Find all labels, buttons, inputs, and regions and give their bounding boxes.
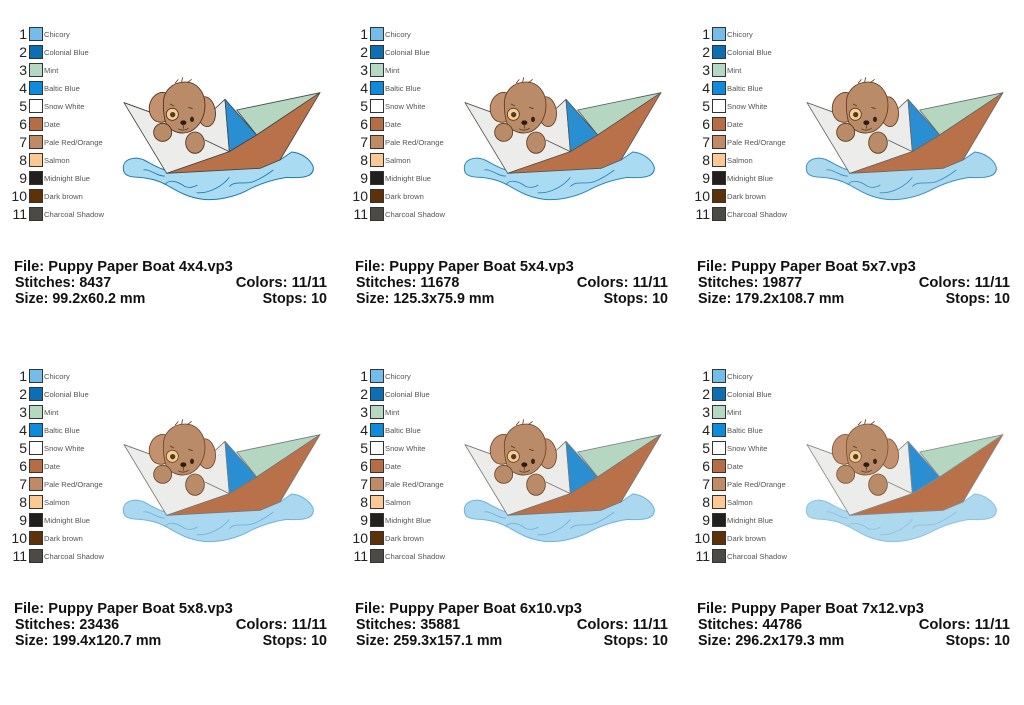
file details: Colors: 11/11 — [236, 617, 327, 633]
file details: Stops: 10 — [946, 291, 1010, 307]
file details: Stitches: 44786 — [698, 617, 802, 633]
legend: thread colours: Mint — [727, 408, 742, 417]
legend: thread colours: 6 — [19, 116, 27, 132]
legend: thread colours: 1 — [19, 368, 27, 384]
legend: thread colours: 11 — [695, 548, 710, 564]
legend: thread colours: 11 — [12, 206, 27, 222]
legend: thread colours: 9 — [19, 170, 27, 186]
legend: thread colours: 10 — [352, 530, 368, 546]
legend: thread colours: Midnight Blue — [727, 174, 773, 183]
file details: Stitches: 23436 — [15, 617, 119, 633]
legend: thread colours: Midnight Blue — [727, 516, 773, 525]
legend: thread colours: Colonial Blue — [44, 390, 89, 399]
legend: thread colours: Pale Red/Orange — [727, 480, 786, 489]
legend: thread colours: Colonial Blue — [44, 48, 89, 57]
legend: thread colours: Midnight Blue — [44, 516, 90, 525]
legend: thread colours: 1 — [360, 26, 368, 42]
file details — [355, 259, 668, 307]
legend: thread colours: 3 — [19, 62, 27, 78]
legend: thread colours: 4 — [702, 422, 710, 438]
legend: thread colours: 11 — [353, 548, 368, 564]
file details — [697, 259, 1010, 307]
file details: File: Puppy Paper Boat 4x4.vp3 — [14, 259, 233, 275]
legend: thread colours: Baltic Blue — [44, 84, 80, 93]
legend: thread colours: Snow White — [727, 102, 768, 111]
legend: thread colours: Pale Red/Orange — [44, 138, 103, 147]
legend: thread colours: Date — [385, 462, 401, 471]
legend: thread colours: Baltic Blue — [385, 84, 421, 93]
legend: thread colours: Charcoal Shadow — [727, 210, 787, 219]
legend: thread colours: 8 — [702, 152, 710, 168]
legend: thread colours: Charcoal Shadow — [44, 210, 104, 219]
legend: thread colours: 6 — [19, 458, 27, 474]
legend: thread colours: 5 — [360, 440, 368, 456]
file details: Colors: 11/11 — [236, 275, 327, 291]
file details: Size: 99.2x60.2 mm — [15, 291, 145, 307]
legend: thread colours — [352, 26, 445, 222]
file details: Stops: 10 — [263, 291, 327, 307]
legend: thread colours: Dark brown — [44, 192, 83, 201]
legend: thread colours: 11 — [12, 548, 27, 564]
legend: thread colours: Mint — [385, 408, 400, 417]
legend: thread colours: 10 — [11, 188, 27, 204]
legend: thread colours: 1 — [702, 368, 710, 384]
legend: thread colours: 5 — [19, 98, 27, 114]
legend: thread colours: Mint — [727, 66, 742, 75]
legend: thread colours: Salmon — [727, 498, 753, 507]
legend: thread colours: 7 — [702, 134, 710, 150]
file details: Stops: 10 — [604, 633, 668, 649]
legend: thread colours: 4 — [19, 80, 27, 96]
file details: Colors: 11/11 — [577, 275, 668, 291]
legend: thread colours: 9 — [360, 170, 368, 186]
legend: thread colours: 3 — [360, 404, 368, 420]
legend: thread colours: Dark brown — [385, 534, 424, 543]
legend: thread colours — [11, 26, 104, 222]
panel: Puppy Paper Boat 7x12 — [694, 368, 1010, 649]
legend: thread colours: 2 — [702, 386, 710, 402]
file details: Stitches: 8437 — [15, 275, 111, 291]
legend: thread colours: 1 — [360, 368, 368, 384]
legend: thread colours: 2 — [19, 44, 27, 60]
legend: thread colours: 7 — [360, 476, 368, 492]
legend: thread colours: 10 — [694, 530, 710, 546]
legend: thread colours: 7 — [19, 476, 27, 492]
legend: thread colours: 2 — [360, 44, 368, 60]
legend: thread colours: 10 — [694, 188, 710, 204]
legend: thread colours: 9 — [702, 512, 710, 528]
legend: thread colours: 2 — [19, 386, 27, 402]
file details: Stitches: 19877 — [698, 275, 802, 291]
legend: thread colours: Baltic Blue — [727, 426, 763, 435]
file details: Size: 199.4x120.7 mm — [15, 633, 161, 649]
legend: thread colours: 5 — [702, 440, 710, 456]
legend: thread colours: Charcoal Shadow — [727, 552, 787, 561]
panel: Puppy Paper Boat 5x7 — [694, 26, 1010, 307]
legend: thread colours: 6 — [360, 116, 368, 132]
legend: thread colours: 9 — [702, 170, 710, 186]
legend: thread colours — [11, 368, 104, 564]
legend: thread colours: Salmon — [44, 156, 70, 165]
legend: thread colours: Chicory — [44, 30, 70, 39]
legend: thread colours: Pale Red/Orange — [385, 480, 444, 489]
legend: thread colours: Snow White — [44, 102, 85, 111]
file details: File: Puppy Paper Boat 6x10.vp3 — [355, 601, 582, 617]
file details: Size: 179.2x108.7 mm — [698, 291, 844, 307]
legend: thread colours: 2 — [702, 44, 710, 60]
legend: thread colours — [352, 368, 445, 564]
panel: Puppy Paper Boat 6x10 — [352, 368, 668, 649]
panel: Puppy Paper Boat 5x4 — [352, 26, 668, 307]
legend: thread colours: 11 — [353, 206, 368, 222]
illustration: puppy in paper boat — [806, 77, 1003, 200]
file details: File: Puppy Paper Boat 7x12.vp3 — [697, 601, 924, 617]
legend: thread colours: Snow White — [385, 444, 426, 453]
legend: thread colours: Mint — [44, 66, 59, 75]
file details: Colors: 11/11 — [919, 275, 1010, 291]
legend: thread colours: Dark brown — [727, 192, 766, 201]
legend: thread colours: Midnight Blue — [385, 516, 431, 525]
file details — [14, 601, 327, 649]
legend: thread colours: Pale Red/Orange — [385, 138, 444, 147]
legend: thread colours: Salmon — [385, 498, 411, 507]
legend: thread colours: 8 — [360, 152, 368, 168]
file details: Colors: 11/11 — [919, 617, 1010, 633]
legend: thread colours: 7 — [702, 476, 710, 492]
legend: thread colours: Chicory — [385, 372, 411, 381]
legend: thread colours: Date — [44, 462, 60, 471]
legend: thread colours: Pale Red/Orange — [44, 480, 103, 489]
legend: thread colours: 7 — [19, 134, 27, 150]
legend: thread colours: Date — [385, 120, 401, 129]
legend: thread colours: Colonial Blue — [385, 390, 430, 399]
file details: File: Puppy Paper Boat 5x4.vp3 — [355, 259, 574, 275]
legend: thread colours: Date — [727, 120, 743, 129]
legend: thread colours: 1 — [702, 26, 710, 42]
file details: Stitches: 35881 — [356, 617, 460, 633]
legend: thread colours: 8 — [19, 494, 27, 510]
legend: thread colours: Baltic Blue — [385, 426, 421, 435]
legend: thread colours: Mint — [385, 66, 400, 75]
legend: thread colours: 6 — [702, 458, 710, 474]
legend: thread colours: Midnight Blue — [44, 174, 90, 183]
legend: thread colours: Colonial Blue — [727, 390, 772, 399]
legend: thread colours: Snow White — [727, 444, 768, 453]
file details: File: Puppy Paper Boat 5x7.vp3 — [697, 259, 916, 275]
legend: thread colours: 8 — [702, 494, 710, 510]
legend: thread colours: Chicory — [385, 30, 411, 39]
legend: thread colours: 5 — [360, 98, 368, 114]
illustration: puppy in paper boat — [464, 419, 661, 542]
legend: thread colours: 4 — [19, 422, 27, 438]
legend: thread colours: 5 — [702, 98, 710, 114]
legend: thread colours: Snow White — [44, 444, 85, 453]
legend: thread colours: Charcoal Shadow — [44, 552, 104, 561]
legend: thread colours: Date — [44, 120, 60, 129]
legend: thread colours: Salmon — [385, 156, 411, 165]
legend: thread colours: 4 — [360, 80, 368, 96]
legend: thread colours: Charcoal Shadow — [385, 210, 445, 219]
legend: thread colours — [694, 368, 787, 564]
legend: thread colours: 10 — [11, 530, 27, 546]
legend: thread colours: Baltic Blue — [727, 84, 763, 93]
illustration: puppy in paper boat — [806, 419, 1003, 542]
panel: Puppy Paper Boat 4x4 — [11, 26, 327, 307]
legend: thread colours: Chicory — [727, 372, 753, 381]
legend: thread colours: 6 — [702, 116, 710, 132]
file details: File: Puppy Paper Boat 5x8.vp3 — [14, 601, 233, 617]
illustration: puppy in paper boat — [464, 77, 661, 200]
legend: thread colours: 5 — [19, 440, 27, 456]
file details: Stops: 10 — [263, 633, 327, 649]
illustration: puppy in paper boat — [123, 419, 320, 542]
legend: thread colours: 3 — [360, 62, 368, 78]
legend: thread colours: 8 — [360, 494, 368, 510]
legend: thread colours: 1 — [19, 26, 27, 42]
legend: thread colours: Midnight Blue — [385, 174, 431, 183]
file details: Stops: 10 — [604, 291, 668, 307]
file details: Size: 296.2x179.3 mm — [698, 633, 844, 649]
legend: thread colours: Dark brown — [727, 534, 766, 543]
file details — [355, 601, 668, 649]
legend: thread colours: Pale Red/Orange — [727, 138, 786, 147]
file details: Stitches: 11678 — [356, 275, 459, 291]
legend: thread colours: Chicory — [727, 30, 753, 39]
legend: thread colours: 9 — [19, 512, 27, 528]
file details: Colors: 11/11 — [577, 617, 668, 633]
legend: thread colours: 4 — [702, 80, 710, 96]
legend: thread colours: Dark brown — [44, 534, 83, 543]
legend: thread colours: 7 — [360, 134, 368, 150]
legend: thread colours: 11 — [695, 206, 710, 222]
legend: thread colours: Salmon — [727, 156, 753, 165]
illustration: puppy in paper boat — [123, 77, 320, 200]
legend: thread colours: 8 — [19, 152, 27, 168]
legend: thread colours: Dark brown — [385, 192, 424, 201]
legend: thread colours: Mint — [44, 408, 59, 417]
file details: Size: 125.3x75.9 mm — [356, 291, 494, 307]
legend: thread colours: Charcoal Shadow — [385, 552, 445, 561]
legend: thread colours: 4 — [360, 422, 368, 438]
legend: thread colours: Colonial Blue — [385, 48, 430, 57]
file details: Stops: 10 — [946, 633, 1010, 649]
panel: Puppy Paper Boat 5x8 — [11, 368, 327, 649]
legend: thread colours: 9 — [360, 512, 368, 528]
file details — [697, 601, 1010, 649]
legend: thread colours: Date — [727, 462, 743, 471]
legend: thread colours — [694, 26, 787, 222]
legend: thread colours: 2 — [360, 386, 368, 402]
legend: thread colours: Baltic Blue — [44, 426, 80, 435]
legend: thread colours: Colonial Blue — [727, 48, 772, 57]
legend: thread colours: 6 — [360, 458, 368, 474]
legend: thread colours: 3 — [702, 404, 710, 420]
legend: thread colours: Chicory — [44, 372, 70, 381]
legend: thread colours: Snow White — [385, 102, 426, 111]
legend: thread colours: 3 — [702, 62, 710, 78]
legend: thread colours: 3 — [19, 404, 27, 420]
file details: Size: 259.3x157.1 mm — [356, 633, 502, 649]
legend: thread colours: Salmon — [44, 498, 70, 507]
file details — [14, 259, 327, 307]
legend: thread colours: 10 — [352, 188, 368, 204]
